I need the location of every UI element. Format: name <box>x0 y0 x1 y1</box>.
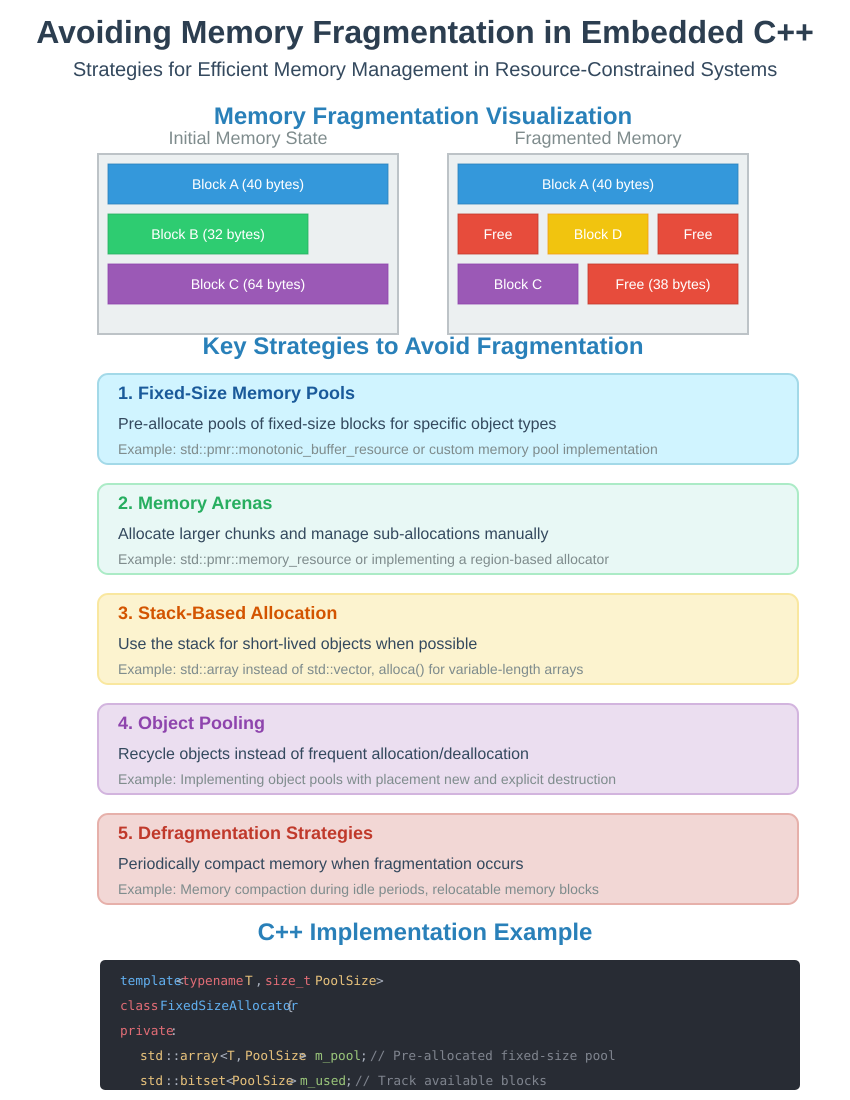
panel: strategy 3: 3. Stack-Based Allocation <box>118 603 337 623</box>
panel: strategy 5: 5. Defragmentation Strategies <box>118 823 373 843</box>
panel: initial memory state <box>98 128 398 334</box>
code block: class <box>120 999 158 1014</box>
panel: strategy 4: Recycle objects instead of frequent allocation/deallocation <box>118 746 529 763</box>
panel: initial memory state: Block A (40 bytes) <box>192 176 304 192</box>
code block: < <box>226 1074 234 1089</box>
panel: strategy 2: 2. Memory Arenas <box>118 493 272 513</box>
panel: strategy 1: Example: std::pmr::monotonic_buffer_resource or custom memory pool implementation <box>118 441 658 457</box>
code block: : <box>170 1024 178 1039</box>
title: Avoiding Memory Fragmentation in Embedded C++ <box>36 14 814 50</box>
code block: // Pre-allocated fixed-size pool <box>370 1049 616 1064</box>
code block: m_used <box>300 1074 346 1089</box>
code block: :: <box>165 1074 180 1089</box>
code block: std <box>140 1049 163 1064</box>
code block: :: <box>165 1049 180 1064</box>
code block <box>100 960 800 1090</box>
panel: strategy 4 <box>98 704 798 794</box>
panel: fragmented memory: Block D <box>574 226 622 242</box>
code block: bitset <box>180 1074 226 1089</box>
code block: T <box>227 1049 235 1064</box>
panel: fragmented memory: Free <box>684 226 713 242</box>
code block: m_pool <box>315 1049 361 1064</box>
code block: PoolSize <box>245 1049 306 1064</box>
heading: code example: C++ Implementation Example <box>258 919 592 946</box>
panel: initial memory state: Initial Memory State <box>168 128 328 148</box>
panel: strategy 1 <box>98 374 798 464</box>
code block: template <box>120 974 181 989</box>
panel: strategy 3: Use the stack for short-lived objects when possible <box>118 636 477 653</box>
heading: strategies: Key Strategies to Avoid Fragmentation <box>203 333 643 360</box>
code block: , <box>255 974 263 989</box>
panel: strategy 1: Pre-allocate pools of fixed-size blocks for specific object types <box>118 416 556 433</box>
code block: , <box>235 1049 243 1064</box>
code block: > <box>289 1074 297 1089</box>
code block: PoolSize <box>232 1074 293 1089</box>
code block: FixedSizeAllocator <box>160 999 298 1014</box>
panel: strategy 4: 4. Object Pooling <box>118 713 265 733</box>
code block: ; <box>360 1049 368 1064</box>
panel: fragmented memory: Free <box>484 226 513 242</box>
panel: strategy 4: Example: Implementing object pools with placement new and explicit destruction <box>118 771 616 787</box>
code block: < <box>220 1049 228 1064</box>
code block: < <box>176 974 184 989</box>
panel: strategy 2 <box>98 484 798 574</box>
subtitle: Strategies for Efficient Memory Management in Resource-Constrained Systems <box>73 59 777 81</box>
panel: fragmented memory <box>448 128 748 334</box>
heading: visualization: Memory Fragmentation Visualization <box>214 103 632 130</box>
panel: initial memory state: Block C (64 bytes) <box>191 276 305 292</box>
code block: std <box>140 1074 163 1089</box>
code block: // Track available blocks <box>355 1074 547 1089</box>
panel: fragmented memory: Fragmented Memory <box>514 128 682 148</box>
code block: T <box>245 974 253 989</box>
panel: strategy 5 <box>98 814 798 904</box>
code block: ; <box>345 1074 353 1089</box>
panel: fragmented memory: Block C <box>494 276 542 292</box>
code block: PoolSize <box>315 974 376 989</box>
panel: strategy 5: Example: Memory compaction during idle periods, relocatable memory blocks <box>118 881 599 897</box>
code block: { <box>286 999 294 1014</box>
panel: strategy 3 <box>98 594 798 684</box>
panel: initial memory state: Block B (32 bytes) <box>151 226 265 242</box>
panel: strategy 1: 1. Fixed-Size Memory Pools <box>118 383 355 403</box>
panel: strategy 2: Example: std::pmr::memory_resource or implementing a region-based allocator <box>118 551 609 567</box>
panel: strategy 2: Allocate larger chunks and manage sub-allocations manually <box>118 526 548 543</box>
code block: array <box>180 1049 219 1064</box>
panel: fragmented memory: Free (38 bytes) <box>616 276 710 292</box>
code block: private <box>120 1024 174 1039</box>
code block: > <box>376 974 384 989</box>
code block: size_t <box>265 974 311 989</box>
code block: > <box>299 1049 307 1064</box>
panel: fragmented memory: Block A (40 bytes) <box>542 176 654 192</box>
code block: typename <box>182 974 243 989</box>
panel: strategy 3: Example: std::array instead of std::vector, alloca() for variable-length arrays <box>118 661 583 677</box>
panel: strategy 5: Periodically compact memory when fragmentation occurs <box>118 856 524 873</box>
